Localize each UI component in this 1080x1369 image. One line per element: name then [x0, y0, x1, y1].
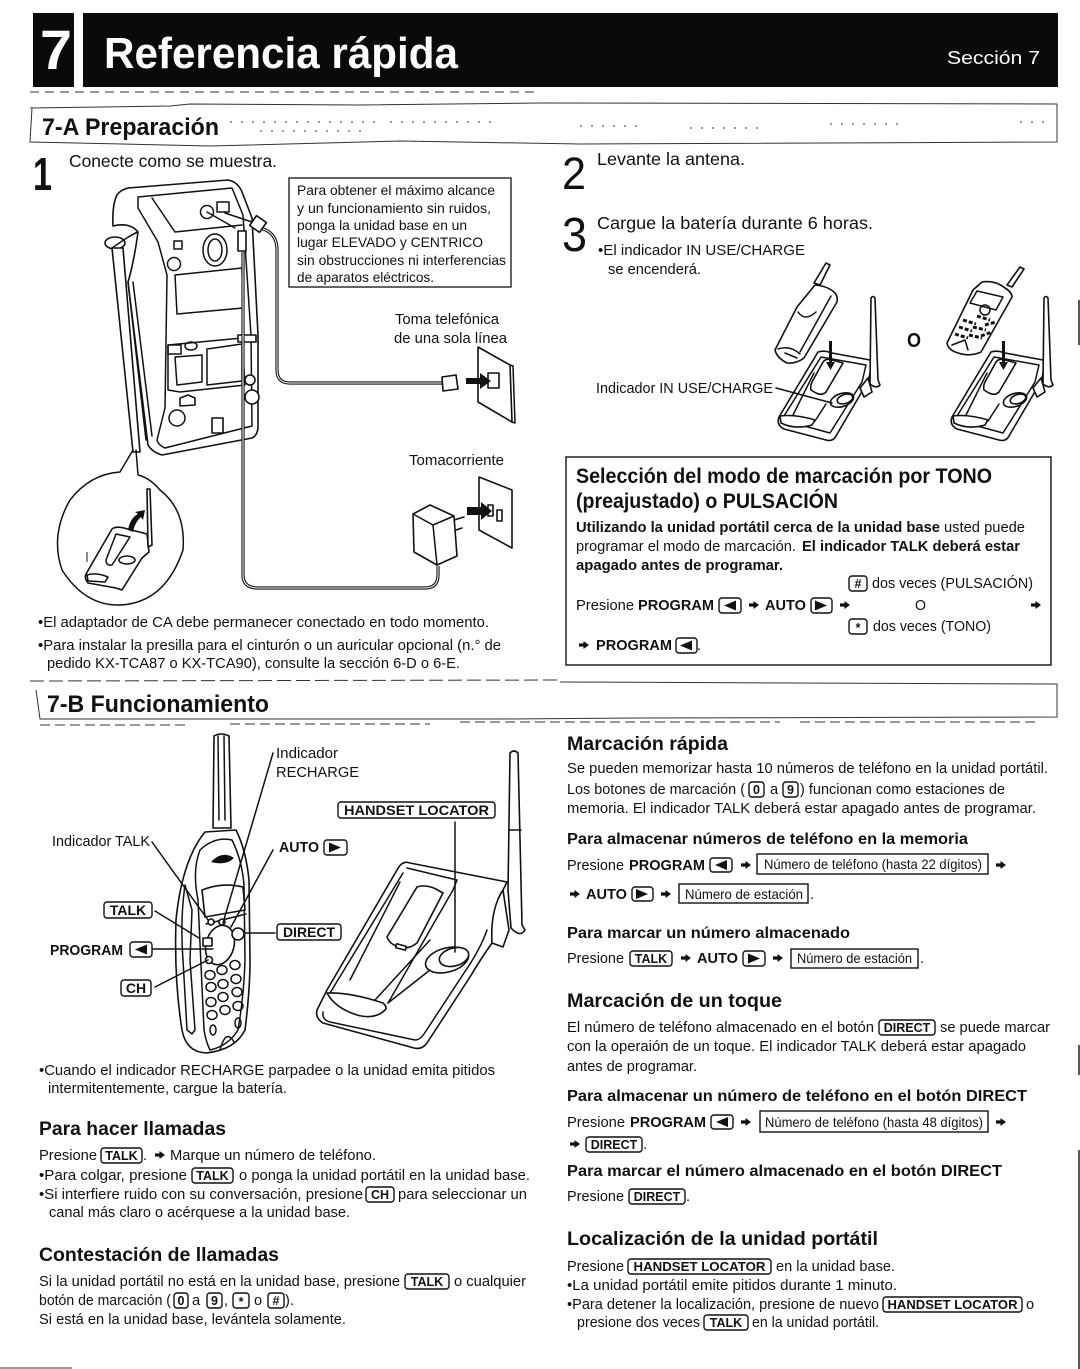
body: presione dos veces [577, 1315, 700, 1331]
store number procedure: . [810, 887, 814, 903]
description: Los botones de marcación ( [567, 782, 745, 798]
step 1 instruction [33, 148, 277, 200]
callout: placement advice: ponga la unidad base en un [297, 218, 467, 233]
store number procedure [567, 831, 1006, 903]
notes: adapter and clip: pedido KX-TCA87 o KX-TCA90), consulte la sección 6-D o 6-E. [47, 656, 460, 672]
illustration: handset with labelled controls [50, 734, 359, 1053]
store in direct procedure: Número de teléfono (hasta 48 dígitos) [765, 1115, 983, 1130]
body: 9 [211, 1294, 218, 1308]
body: Si está en la unidad base, levántela solamente. [39, 1312, 346, 1328]
label: recharge indicator [223, 746, 359, 923]
body: # [273, 1294, 280, 1308]
section: making calls [39, 1118, 530, 1221]
description: antes de programar. [567, 1059, 697, 1075]
description: memoria. El indicador TALK deberá estar apagado antes de programar. [567, 801, 1036, 817]
section: speed dialing [567, 733, 1048, 968]
description [567, 761, 1048, 817]
dial direct procedure [567, 1163, 1002, 1205]
heading: Contestación de llamadas [39, 1244, 279, 1266]
callout: placement advice [289, 178, 511, 287]
label: telephone jack: Toma telefónica [395, 312, 500, 328]
key sequence: # [855, 577, 862, 591]
illustration: base antenna and belt clip [105, 232, 152, 452]
callout: placement advice: de aparatos eléctricos. [297, 270, 434, 285]
description [567, 1020, 1050, 1075]
store in direct procedure: PROGRAM [630, 1115, 706, 1131]
label: talk key [104, 902, 199, 938]
inset: belt clip detail [58, 450, 183, 605]
steps: Marque un número de teléfono. [170, 1148, 376, 1164]
label: talk key: TALK [110, 902, 146, 918]
heading: Localización de la unidad portátil [567, 1228, 878, 1250]
header bar [33, 13, 1058, 87]
panel description: El indicador TALK deberá estar [802, 539, 1020, 555]
steps: Presione [39, 1148, 97, 1164]
steps: TALK [196, 1169, 229, 1183]
description: se puede marcar [940, 1020, 1050, 1036]
step 1 instruction: Conecte como se muestra. [69, 151, 277, 171]
panel: tone or pulse dialing mode [566, 457, 1051, 665]
store in direct procedure: . [643, 1137, 647, 1153]
description: a [770, 782, 779, 798]
label: or: O [907, 330, 921, 352]
steps: o ponga la unidad portátil en la unidad base. [239, 1168, 530, 1184]
key sequence: PROGRAM [638, 598, 714, 614]
description: El número de teléfono almacenado en el botón [567, 1020, 874, 1036]
key sequence: AUTO [765, 598, 806, 614]
body: 0 [178, 1294, 185, 1308]
body [39, 1274, 526, 1328]
icon: wall jack [466, 347, 515, 423]
section number tab: 7 [40, 18, 72, 81]
body: TALK [710, 1316, 742, 1330]
steps: . [143, 1148, 147, 1164]
body: Presione [567, 1259, 624, 1275]
body: a [192, 1293, 201, 1309]
step 3 instruction [562, 209, 873, 278]
body: HANDSET LOCATOR [634, 1260, 766, 1274]
note: recharge: •Cuando el indicador RECHARGE parpadee o la unidad emita pitidos [39, 1063, 495, 1079]
panel description: Utilizando la unidad portátil cerca de la unidad base [576, 520, 940, 536]
base body [317, 751, 525, 1048]
description: 0 [753, 783, 760, 797]
dial stored number procedure [567, 925, 924, 968]
store in direct procedure: Para almacenar un número de teléfono en el botón DIRECT [567, 1088, 1027, 1105]
step 3 instruction: se encenderá. [608, 262, 701, 278]
steps: •Para colgar, presione [39, 1168, 187, 1184]
step 2 instruction [562, 148, 745, 199]
key sequence: * [856, 621, 861, 635]
heading text: 7-B Funcionamiento [47, 691, 269, 718]
description: con la operaión de un toque. El indicador TALK deberá estar apagado [567, 1039, 1026, 1055]
store in direct procedure: DIRECT [591, 1138, 638, 1152]
dial direct procedure: . [686, 1189, 690, 1205]
label: IN USE/CHARGE indicator: Indicador IN USE/CHARGE [596, 381, 773, 397]
section: answering calls [39, 1244, 526, 1328]
body: •Para detener la localización, presione de nuevo [567, 1297, 879, 1313]
body: * [239, 1295, 244, 1309]
steps: •Si interfiere ruido con su conversación, presione [39, 1187, 363, 1203]
callout: placement advice: y un funcionamiento sin ruidos, [297, 201, 491, 216]
key sequence: dos veces (PULSACIÓN) [872, 575, 1033, 592]
title: Referencia rápida [104, 29, 458, 78]
description: Se pueden memorizar hasta 10 números de teléfono en la unidad portátil. [567, 761, 1048, 777]
body: en la unidad base. [776, 1259, 895, 1275]
label: channel key: CH [126, 980, 146, 996]
store number procedure: Número de estación [685, 887, 803, 902]
dial stored number procedure: Número de estación [797, 951, 912, 966]
notes: adapter and clip [38, 615, 501, 672]
steps [39, 1148, 530, 1221]
panel heading [576, 465, 992, 513]
label: recharge indicator: RECHARGE [276, 765, 359, 781]
label: program key: PROGRAM [50, 943, 123, 959]
section: handset locator [567, 1228, 1034, 1331]
step 1 instruction: 1 [33, 148, 52, 200]
dial stored number procedure: . [920, 951, 924, 967]
label: channel key [121, 960, 208, 996]
heading: Para hacer llamadas [39, 1118, 226, 1140]
illustration: handset front into base [947, 267, 1053, 440]
panel description: usted puede [944, 520, 1025, 536]
step 2 instruction: Levante la antena. [597, 149, 745, 169]
panel description: apagado antes de programar. [576, 558, 783, 574]
steps: TALK [105, 1149, 138, 1163]
section: one-touch dialing [567, 990, 1050, 1205]
panel description [576, 520, 1025, 574]
panel heading: (preajustado) o PULSACIÓN [576, 489, 838, 513]
panel heading: Selección del modo de marcación por TONO [576, 465, 992, 488]
label: auto key: AUTO [279, 840, 319, 856]
label: handset locator key [338, 802, 495, 952]
body: o [1026, 1297, 1034, 1313]
body: , [224, 1293, 228, 1309]
illustration: handset back into base [775, 263, 880, 440]
heading: Marcación rápida [567, 733, 728, 755]
label: handset locator key: HANDSET LOCATOR [344, 802, 489, 818]
step 2 instruction: 2 [562, 148, 586, 199]
key sequence: O [915, 598, 926, 614]
step 3 instruction: 3 [562, 209, 587, 262]
body: HANDSET LOCATOR [888, 1298, 1018, 1312]
arrow: power cord [243, 252, 438, 588]
dial stored number procedure: Para marcar un número almacenado [567, 925, 850, 942]
label: talk indicator: Indicador TALK [52, 834, 150, 850]
notes: adapter and clip: •Para instalar la presilla para el cinturón o un auricular opcional (n.° de [38, 638, 501, 654]
store in direct procedure [567, 1088, 1027, 1153]
illustration: base unit with locator key [317, 751, 525, 1048]
icon: AC adapter and outlet [413, 477, 512, 565]
body: en la unidad portátil. [752, 1315, 879, 1331]
step 3 instruction: Cargue la batería durante 6 horas. [597, 213, 873, 233]
dial stored number procedure: TALK [635, 952, 667, 966]
note: recharge [39, 1063, 495, 1097]
key sequence: Presione [576, 598, 634, 614]
steps: para seleccionar un [398, 1187, 527, 1203]
heading text: 7-A Preparación [42, 114, 219, 141]
label: telephone jack [394, 312, 508, 347]
panel: 7-B Funcionamiento heading bar [30, 680, 1057, 725]
label: power outlet: Tomacorriente [409, 453, 504, 469]
body: TALK [411, 1275, 443, 1289]
panel description: programar el modo de marcación. [576, 539, 796, 555]
panel: 7-A Preparación heading bar [30, 92, 1057, 146]
label: telephone jack: de una sola línea [394, 331, 508, 347]
store number procedure: Para almacenar números de teléfono en la memoria [567, 831, 968, 848]
dial direct procedure: Presione [567, 1189, 624, 1205]
store number procedure: Presione [567, 858, 624, 874]
body [567, 1259, 1034, 1331]
body: botón de marcación ( [39, 1293, 171, 1309]
body: o [254, 1293, 262, 1309]
callout: placement advice: lugar ELEVADO y CENTRICO [297, 235, 483, 250]
body: •La unidad portátil emite pitidos durante 1 minuto. [567, 1278, 897, 1294]
callout: placement advice: Para obtener el máximo alcance [297, 183, 495, 198]
key sequence: PROGRAM [596, 638, 672, 654]
store number procedure: AUTO [586, 887, 627, 903]
body: Si la unidad portátil no está en la unidad base, presione [39, 1274, 400, 1290]
key sequence: . [697, 638, 701, 654]
label: direct key [245, 924, 341, 940]
arrow: phone line cord to jack [250, 216, 458, 391]
step 3 instruction: •El indicador IN USE/CHARGE [598, 243, 805, 259]
section label: Sección 7 [947, 48, 1040, 68]
label: recharge indicator: Indicador [276, 746, 338, 762]
key sequence: dos veces (TONO) [873, 619, 991, 635]
label: program key [50, 942, 213, 959]
dial stored number procedure: AUTO [697, 951, 738, 967]
description: 9 [787, 783, 794, 797]
dial stored number procedure: Presione [567, 951, 624, 967]
dial direct procedure: Para marcar el número almacenado en el botón DIRECT [567, 1163, 1002, 1180]
callout: placement advice: sin obstrucciones ni interferencias [297, 253, 506, 268]
illustration: rear of base unit [113, 180, 259, 455]
label: direct key: DIRECT [283, 924, 335, 940]
description: DIRECT [884, 1021, 931, 1035]
description: ) funcionan como estaciones de [800, 782, 1005, 798]
steps: canal más claro o acérquese a la unidad base. [49, 1205, 350, 1221]
body: ). [285, 1293, 294, 1309]
key sequence [576, 575, 1041, 654]
notes: adapter and clip: •El adaptador de CA debe permanecer conectado en todo momento. [38, 615, 489, 631]
store number procedure: PROGRAM [629, 858, 705, 874]
store number procedure: Número de teléfono (hasta 22 dígitos) [764, 857, 982, 872]
handset [176, 734, 250, 1053]
title banner [83, 13, 1058, 87]
dial direct procedure: DIRECT [634, 1190, 681, 1204]
label: talk indicator [52, 834, 208, 920]
heading: Marcación de un toque [567, 990, 782, 1012]
label: IN USE/CHARGE indicator [596, 381, 832, 403]
store in direct procedure: Presione [567, 1115, 625, 1131]
body: o cualquier [454, 1274, 526, 1290]
section number tab [33, 13, 74, 87]
label: auto key [231, 840, 347, 927]
note: recharge: intermitentemente, cargue la batería. [48, 1081, 287, 1097]
steps: CH [371, 1188, 389, 1202]
